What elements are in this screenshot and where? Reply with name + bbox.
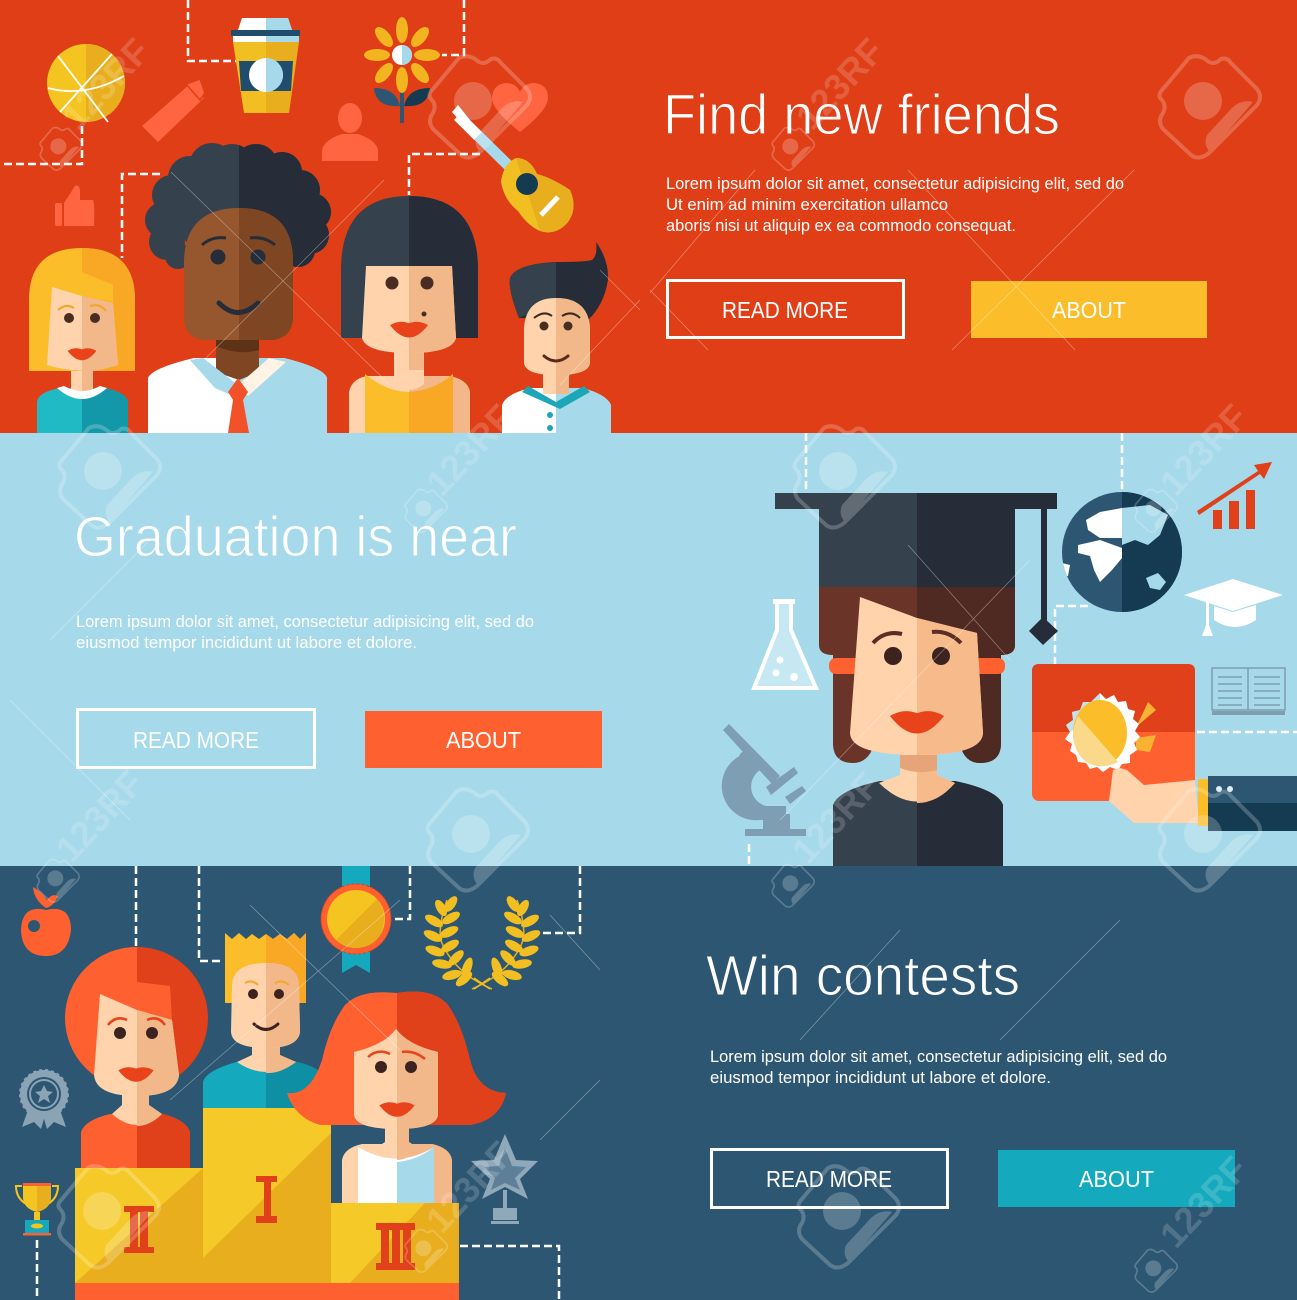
icon: open book xyxy=(1212,668,1285,715)
watermark overlay: 123RF xyxy=(418,396,522,503)
text block: friends copy: Lorem ipsum dolor sit amet, consectetur adipisicing elit, sed do xyxy=(666,175,1124,193)
icon: candy bar xyxy=(142,79,205,142)
icon: coffee cup xyxy=(231,18,300,113)
person: woman with black bob xyxy=(341,196,478,433)
text block: contests copy xyxy=(710,1048,1167,1087)
person: red-haired woman right xyxy=(287,992,506,1203)
icon: laurel wreath xyxy=(422,894,542,989)
icon: thumbs up xyxy=(55,186,94,226)
podium with medals xyxy=(75,1108,459,1300)
icon: gold medal xyxy=(321,866,391,973)
person: blonde woman xyxy=(29,248,135,433)
person: boy with crown xyxy=(203,933,321,1110)
panel: find new friends xyxy=(0,0,1297,433)
watermark overlay: 123RF xyxy=(48,762,152,869)
text block: graduation copy: eiusmod tempor incididunt ut labore et dolore. xyxy=(76,634,417,652)
button: read more: READ MORE xyxy=(722,297,848,323)
button: about xyxy=(998,1150,1235,1207)
icon: apple xyxy=(21,887,71,956)
heading: graduation is near: Graduation is near xyxy=(74,505,517,569)
icon: microscope xyxy=(722,724,806,836)
text block: graduation copy xyxy=(76,613,534,652)
button: about: ABOUT xyxy=(446,727,521,753)
watermark overlay: 123RF xyxy=(1152,396,1256,503)
watermark overlay: 123RF xyxy=(54,30,158,137)
person: red-haired woman left xyxy=(65,947,208,1175)
text block: contests copy: eiusmod tempor incididunt ut labore et dolore. xyxy=(710,1069,1051,1087)
button: about: ABOUT xyxy=(1052,297,1126,323)
watermark overlay: 123RF xyxy=(418,1133,522,1240)
numeral: III xyxy=(376,1223,415,1270)
icon: heart xyxy=(492,83,548,132)
icon: basketball xyxy=(47,44,125,122)
button: about: ABOUT xyxy=(1079,1166,1154,1192)
icon: person xyxy=(322,103,378,161)
icon: guitar xyxy=(452,105,574,232)
icon: trophy xyxy=(16,1183,58,1236)
watermark overlay: 123RF xyxy=(784,764,888,871)
text block: contests copy: Lorem ipsum dolor sit amet, consectetur adipisicing elit, sed do xyxy=(710,1048,1167,1066)
button: read more xyxy=(712,1150,948,1208)
text block: friends copy: Ut enim ad minim exercitation ullamco xyxy=(666,196,948,214)
panel: graduation is near xyxy=(0,433,1297,866)
button: read more: READ MORE xyxy=(766,1166,892,1192)
button: about xyxy=(971,281,1207,338)
icon: star award xyxy=(471,1134,538,1224)
text block: graduation copy: Lorem ipsum dolor sit amet, consectetur adipisicing elit, sed do xyxy=(76,613,534,631)
person: boy with quiff xyxy=(502,242,611,433)
heading: find new friends: Find new friends xyxy=(663,83,1060,147)
icon: globe xyxy=(1062,492,1182,612)
button: read more xyxy=(668,280,904,338)
icon: flask xyxy=(754,599,816,688)
icon: certificate and hand xyxy=(1032,664,1297,831)
person: graduate with cap xyxy=(775,493,1058,866)
text block: friends copy xyxy=(666,175,1124,235)
panel: win contests xyxy=(0,866,1297,1300)
person: man with afro and tie xyxy=(145,143,331,433)
numeral: I xyxy=(256,1176,277,1223)
button: read more: READ MORE xyxy=(133,727,259,753)
icon: white graduation cap xyxy=(1184,579,1283,636)
text block: friends copy: aboris nisi ut aliquip ex ea commodo consequat. xyxy=(666,217,1016,235)
heading: win contests: Win contests xyxy=(706,944,1020,1008)
watermark overlay: 123RF xyxy=(788,30,892,137)
button: about xyxy=(365,711,602,768)
watermark overlay: 123RF xyxy=(1152,1148,1256,1255)
numeral: II xyxy=(124,1206,154,1253)
button: read more xyxy=(78,710,314,768)
icon: rosette xyxy=(20,1070,68,1129)
icon: flower xyxy=(364,17,440,123)
icon: growth chart with arrow xyxy=(1197,462,1272,529)
